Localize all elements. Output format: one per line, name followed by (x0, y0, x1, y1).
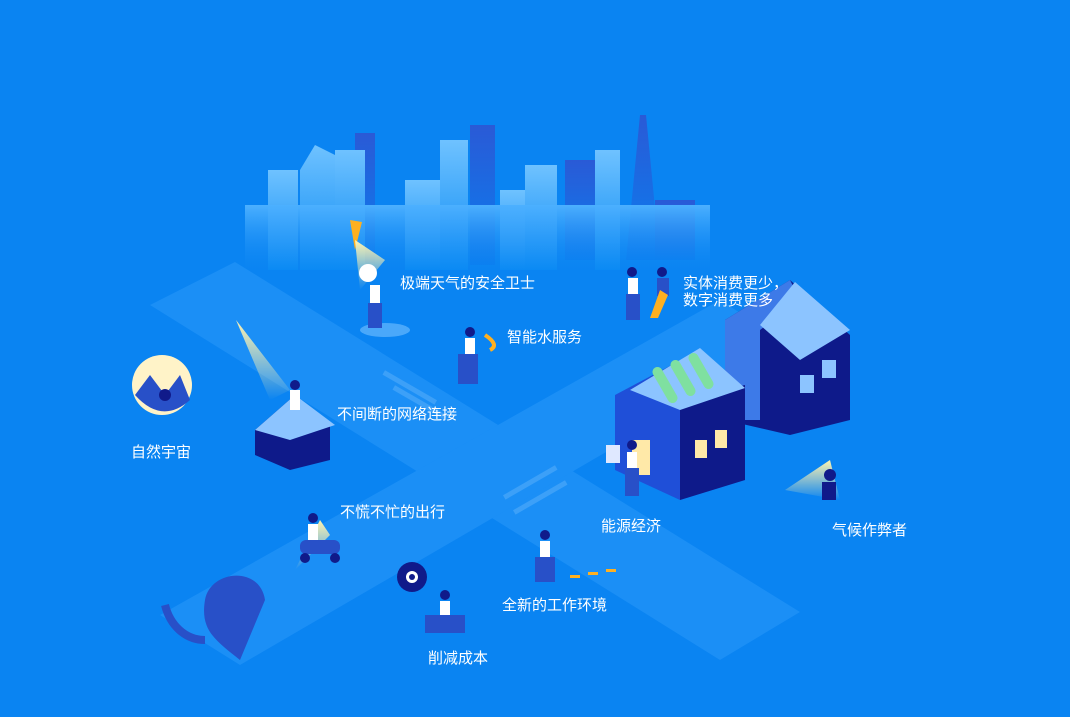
figure: climate cheater (785, 460, 840, 500)
labels: 智能水服务 (507, 328, 582, 346)
figure: water service (458, 327, 494, 384)
house with person and beam (network) (236, 320, 335, 470)
figure: energy (606, 440, 639, 496)
house left (front) with solar (615, 348, 745, 500)
labels: 气候作弊者 (832, 522, 907, 539)
labels: 极端天气的安全卫士 (400, 274, 535, 292)
crosswalk (383, 370, 567, 515)
labels: 全新的工作环境 (502, 596, 607, 614)
labels: 能源经济 (601, 518, 661, 535)
figures: consumption (626, 267, 669, 320)
house right (back) (725, 280, 850, 435)
figure: new workplace (535, 530, 616, 582)
skyline (245, 115, 710, 275)
figure: weather guard (350, 220, 410, 337)
labels: 不间断的网络连接 (337, 406, 457, 423)
labels: 不慌不忙的出行 (340, 504, 445, 521)
labels: 数字消费更多 (683, 292, 773, 309)
labels: 实体消费更少， (683, 275, 788, 292)
figure: scooter rider (295, 513, 340, 570)
labels (131, 274, 907, 667)
road: top-left to bottom-right (150, 262, 800, 660)
icon: moon circle (nature universe) (132, 355, 192, 415)
figure: cost cutting with eye (397, 562, 465, 633)
labels: 削减成本 (428, 650, 488, 667)
road: bottom-left to top-right (160, 300, 790, 665)
blob: snail shape (165, 576, 265, 660)
labels: 自然宇宙 (131, 444, 191, 461)
